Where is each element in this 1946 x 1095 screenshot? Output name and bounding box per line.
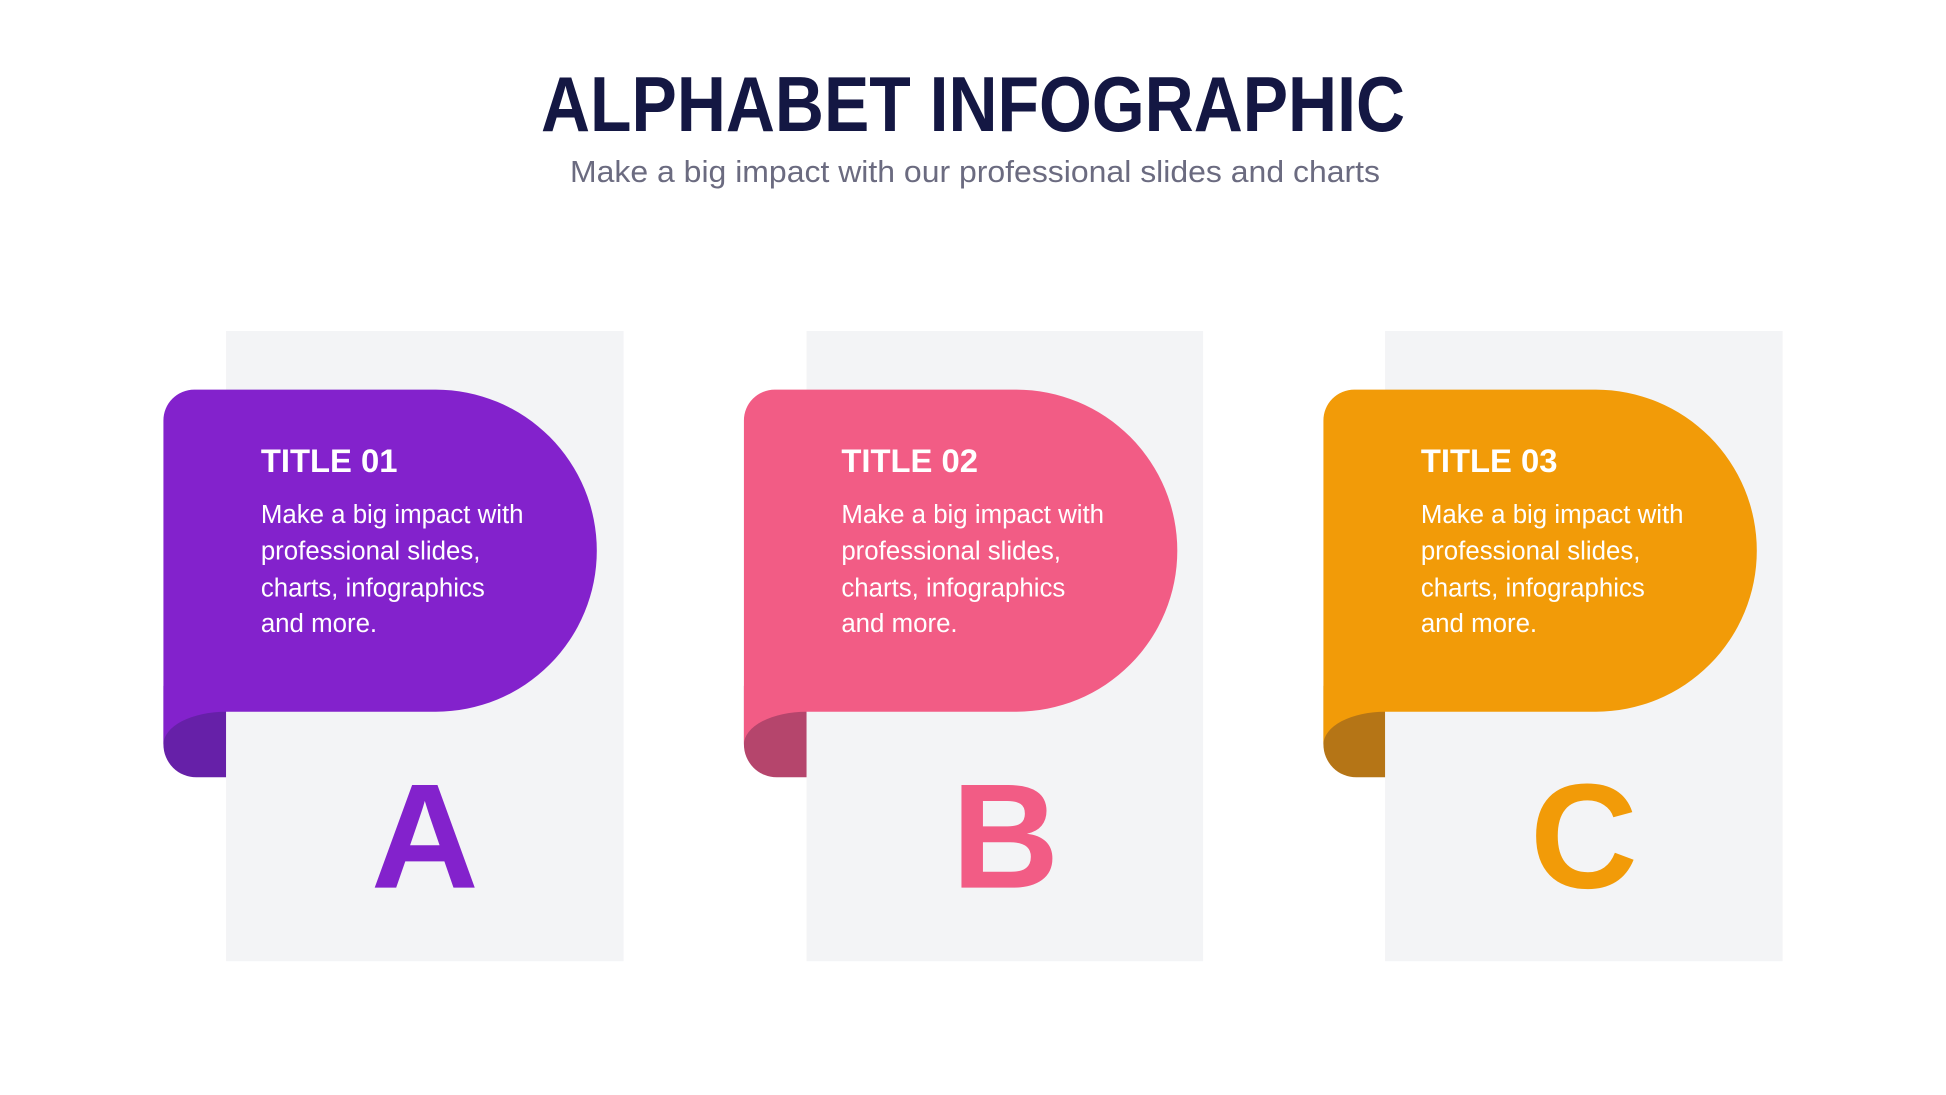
panel: C [1323, 331, 1783, 961]
letter A: A [371, 753, 479, 920]
shape: A [163, 390, 597, 745]
curl: B [744, 686, 807, 777]
shape: B [744, 390, 1177, 745]
heading: TITLE 02: TITLE 02 [841, 442, 978, 479]
text block: Make a big impact with [261, 501, 524, 529]
curl: A [163, 686, 226, 777]
text block: professional slides, [1421, 538, 1640, 566]
shape: C [1323, 390, 1757, 745]
title: ALPHABET INFOGRAPHIC [541, 60, 1405, 148]
text block: Make a big impact with [841, 501, 1104, 529]
text block: Make a big impact with [1421, 501, 1684, 529]
text block: professional slides, [261, 538, 480, 566]
heading: TITLE 01: TITLE 01 [261, 442, 398, 479]
heading: TITLE 03: TITLE 03 [1421, 442, 1558, 479]
text block: professional slides, [841, 538, 1061, 566]
subtitle: Make a big impact with our professional slides and charts [570, 154, 1380, 189]
letter C: C [1530, 753, 1638, 920]
text block: and more. [1421, 610, 1537, 638]
panel: A [163, 331, 624, 961]
text block: charts, infographics [841, 574, 1065, 602]
text block: and more. [261, 610, 377, 638]
letter B: B [952, 753, 1059, 920]
panels wrapper [163, 331, 1783, 961]
text block: and more. [841, 610, 958, 638]
text block: charts, infographics [261, 574, 485, 602]
text block: charts, infographics [1421, 574, 1645, 602]
panel: B [744, 331, 1203, 961]
curl: C [1323, 686, 1385, 777]
